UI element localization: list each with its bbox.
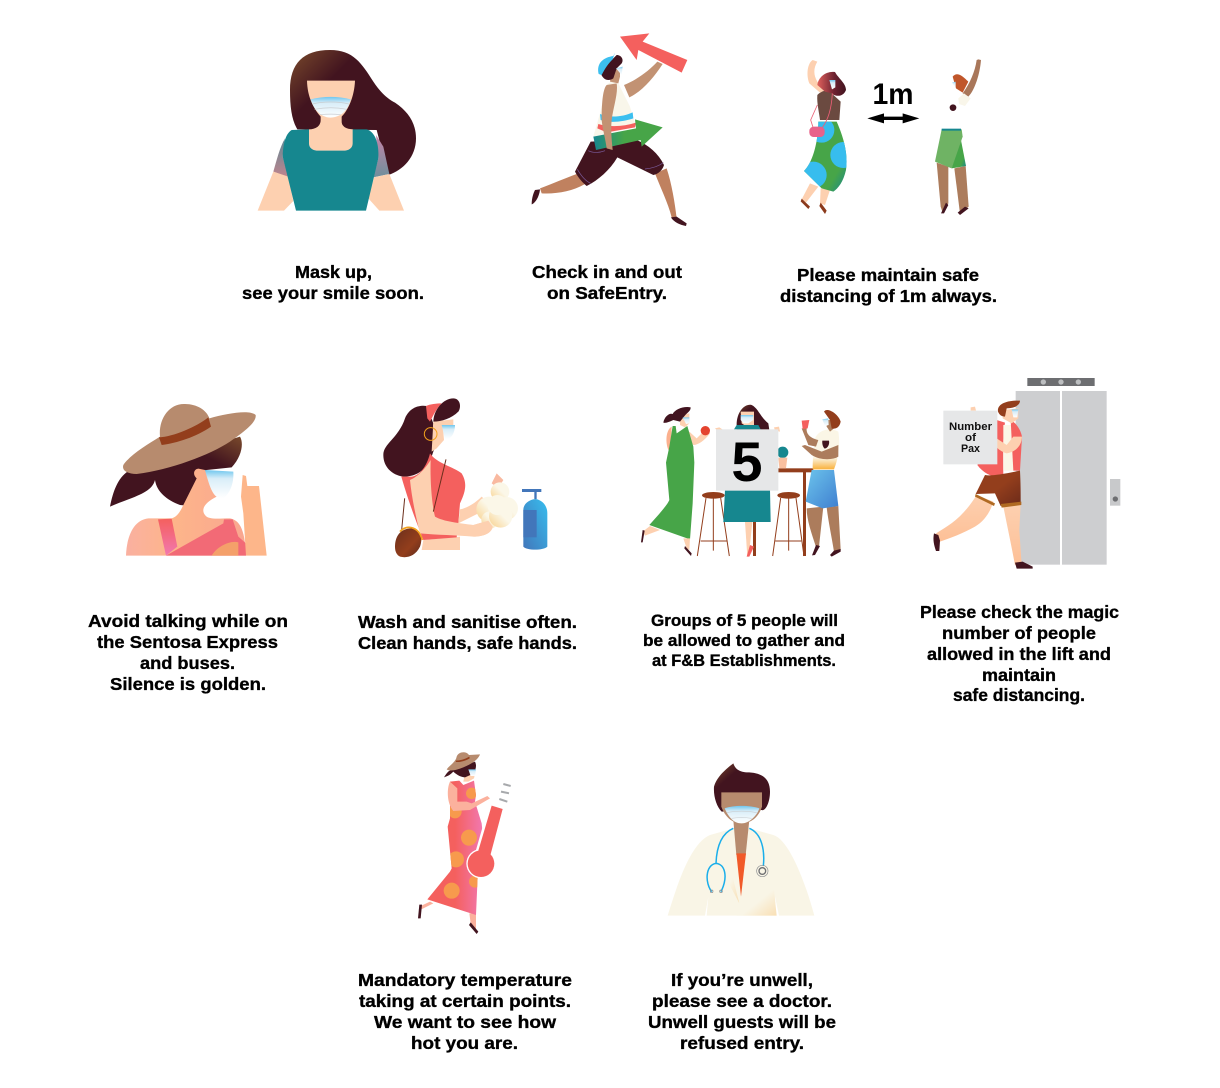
illustration: woman in hat hushing — [110, 404, 267, 556]
sign: 5 — [716, 429, 778, 491]
caption: mask up — [242, 262, 424, 303]
caption: check in: on SafeEntry. — [547, 283, 667, 303]
panel: check in and out — [532, 33, 687, 303]
icon: red arrow — [620, 33, 687, 73]
panel: avoid talking — [88, 404, 288, 694]
panel: temperature — [358, 752, 572, 1053]
illustration: woman wearing mask — [258, 50, 416, 211]
label: number of pax — [949, 421, 993, 455]
caption: see a doctor — [648, 970, 836, 1053]
caption: wash hands: Clean hands, safe hands. — [358, 633, 577, 653]
icon: purse — [395, 527, 422, 557]
caption: avoid talking: Silence is golden. — [110, 674, 266, 694]
caption: wash hands — [358, 612, 577, 653]
caption: lift: allowed in the lift and — [927, 644, 1111, 664]
caption: see a doctor: refused entry. — [680, 1033, 804, 1053]
caption: groups of 5: be allowed to gather and — [643, 632, 845, 650]
icon: face mask — [311, 97, 351, 118]
icon: plant — [777, 447, 788, 468]
number: 5: 5 — [731, 430, 763, 493]
panel: see a doctor — [648, 763, 836, 1053]
illustration: woman with thermometer — [418, 752, 511, 934]
caption: mask up: Mask up, — [295, 262, 372, 282]
caption: lift: Please check the magic — [920, 602, 1119, 622]
icon: lift — [1016, 378, 1120, 565]
caption: check in: Check in and out — [532, 262, 682, 282]
label: number of pax: Number — [949, 421, 993, 433]
caption: see a doctor: Unwell guests will be — [648, 1012, 836, 1032]
illustration: lift doors and man — [933, 378, 1120, 569]
caption: temperature: We want to see how — [374, 1012, 556, 1032]
caption: wash hands: Wash and sanitise often. — [358, 612, 577, 632]
panel: mask up — [242, 50, 424, 303]
caption: groups of 5 — [643, 612, 845, 670]
caption: avoid talking: Avoid talking while on — [88, 611, 288, 631]
icon: sun hat small — [447, 752, 480, 770]
panel: groups of 5 — [641, 405, 845, 670]
caption: groups of 5: Groups of 5 people will — [651, 612, 838, 630]
illustration: doctor — [668, 763, 814, 916]
caption: temperature: Mandatory temperature — [358, 970, 572, 990]
icon: sun hat — [123, 404, 256, 474]
icon: green arrow — [593, 119, 663, 150]
icon: sanitiser bottle — [522, 489, 547, 550]
panel: lift — [920, 378, 1120, 705]
sign: number of pax — [943, 411, 997, 464]
caption: safe distancing: distancing of 1m always. — [780, 286, 997, 306]
label: number of pax: Pax — [961, 443, 981, 455]
caption: see a doctor: please see a doctor. — [652, 991, 832, 1011]
illustration: two people 1m apart — [800, 59, 981, 215]
caption: avoid talking: and buses. — [140, 653, 235, 673]
illustration: group at table — [641, 405, 841, 557]
label: number of pax: of — [965, 432, 976, 444]
panel: safe distancing — [780, 59, 997, 306]
caption: temperature: hot you are. — [411, 1033, 518, 1053]
icon: thermometer — [466, 784, 511, 878]
caption: groups of 5: at F&B Establishments. — [652, 652, 836, 670]
caption: safe distancing: Please maintain safe — [797, 265, 979, 285]
icon: foam — [476, 482, 518, 529]
caption: check in — [532, 262, 682, 303]
illustration: runner with arrows — [532, 33, 687, 226]
caption: lift: maintain — [982, 665, 1056, 685]
icon: stethoscope — [707, 828, 768, 893]
caption: lift: safe distancing. — [953, 685, 1085, 705]
caption: safe distancing — [780, 265, 997, 306]
caption: lift: number of people — [942, 623, 1096, 643]
caption: avoid talking — [88, 611, 288, 694]
panel: wash hands — [358, 398, 577, 653]
arrow: double-headed 1m — [867, 113, 919, 123]
caption: temperature: taking at certain points. — [359, 991, 571, 1011]
caption: lift — [920, 602, 1119, 705]
illustration: woman washing hands — [383, 398, 547, 557]
caption: mask up: see your smile soon. — [242, 283, 424, 303]
caption: avoid talking: the Sentosa Express — [97, 632, 278, 652]
label: 1m: 1m — [872, 78, 914, 111]
caption: temperature — [358, 970, 572, 1053]
caption: see a doctor: If you’re unwell, — [671, 970, 813, 990]
